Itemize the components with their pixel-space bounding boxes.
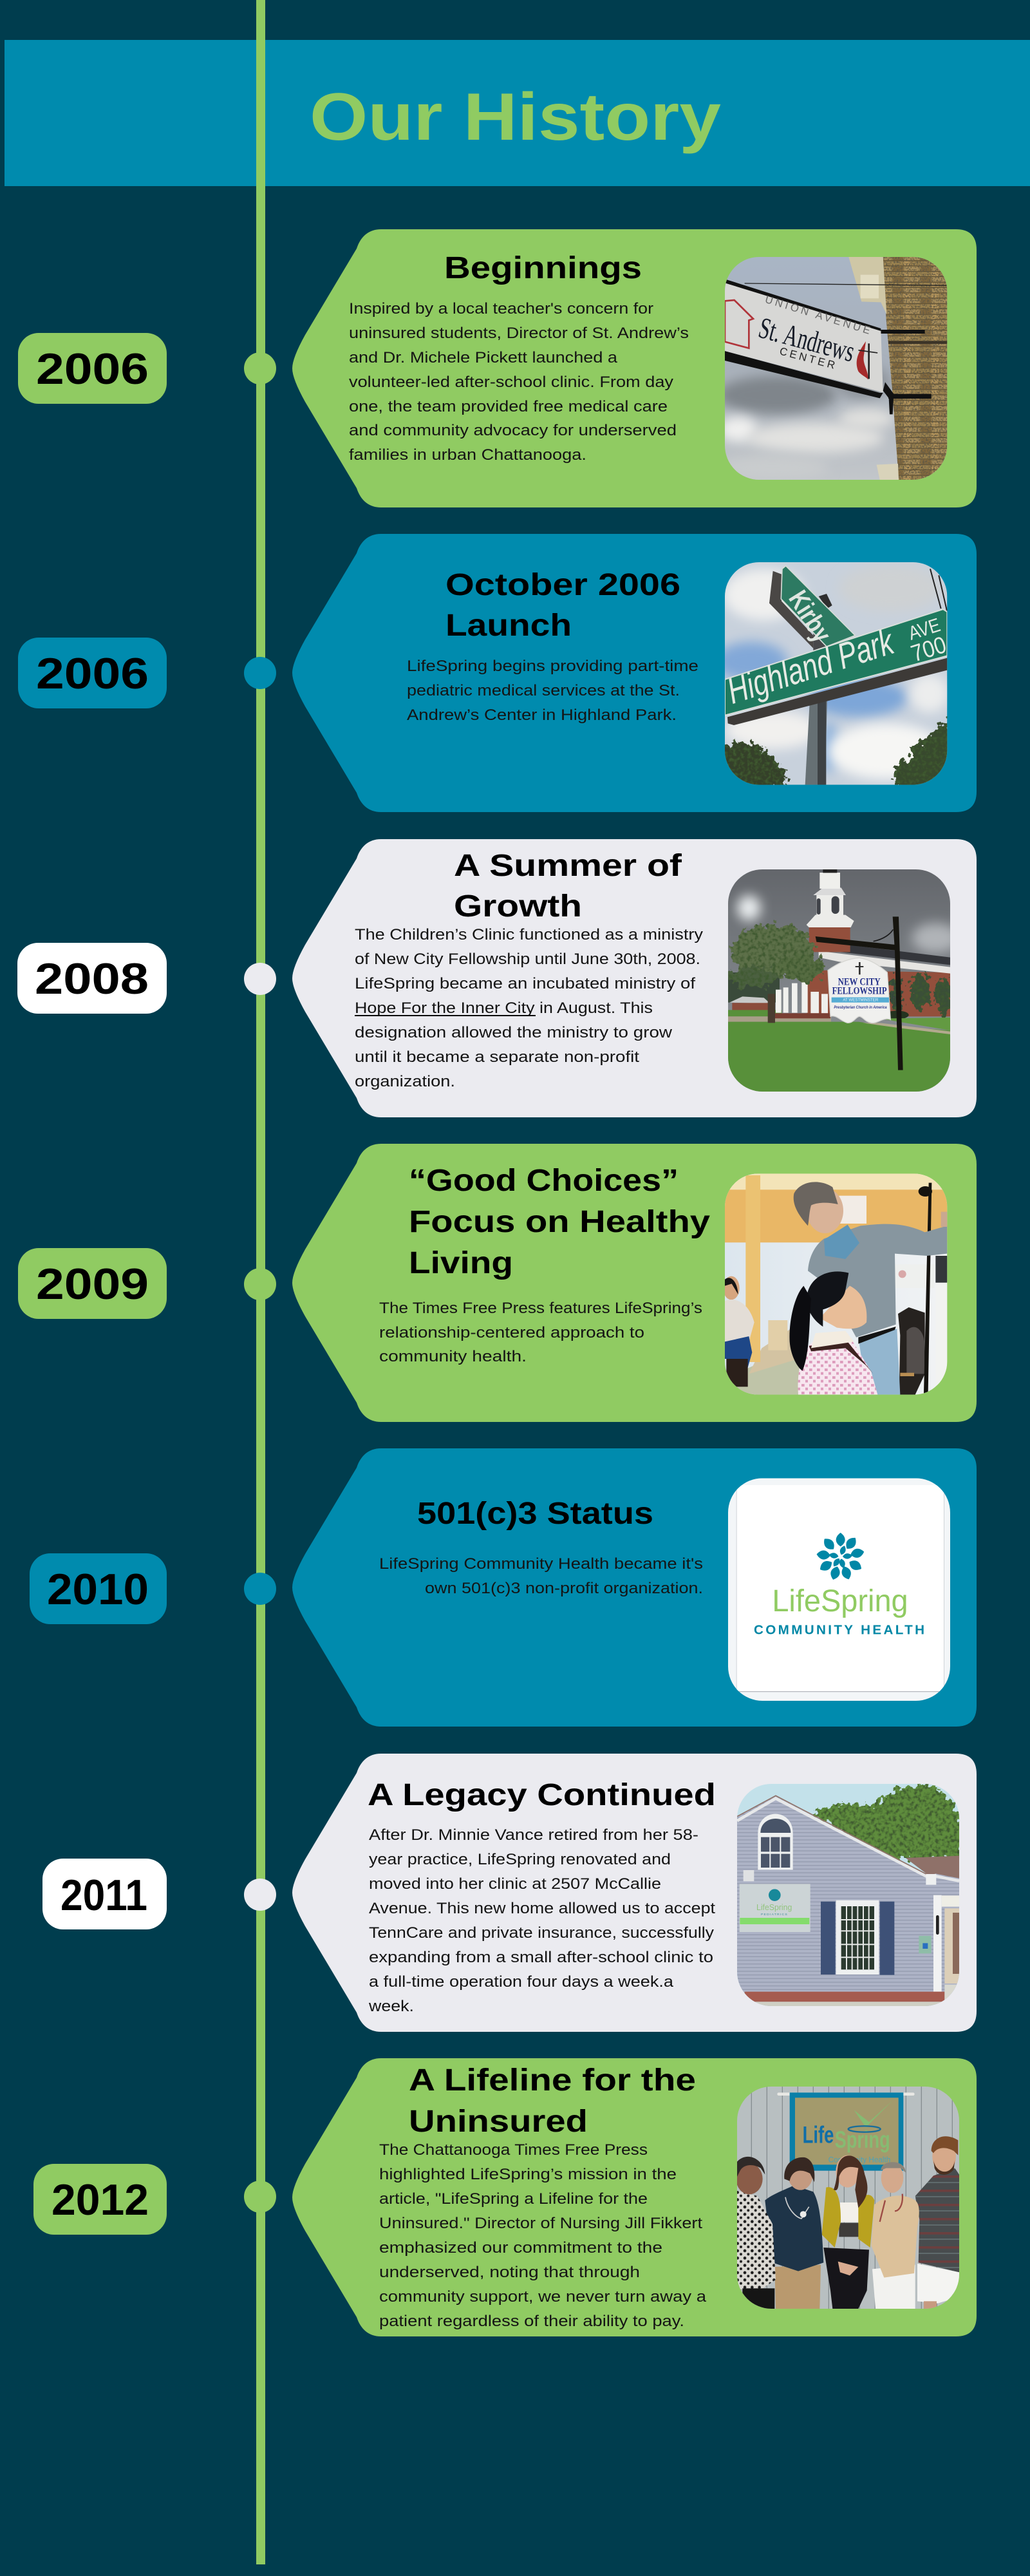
photo: Highland Park street sign: AVE: [906, 614, 943, 645]
body text: and Dr. Michele Pickett launched a: [349, 349, 618, 366]
girl: [789, 1271, 877, 1395]
timeline dot: [244, 657, 276, 689]
heading: “Good Choices”: [409, 1164, 679, 1198]
body text: Hope For the Inner City in August. This: [355, 999, 653, 1017]
wall banner: Community Health: [829, 2155, 890, 2164]
person 1: [736, 2157, 776, 2309]
body text: Uninsured." Director of Nursing Jill Fikkert: [379, 2215, 702, 2232]
photo: New City Fellowship church: AT WESTMINSTER: [843, 999, 879, 1003]
chair and stand: [898, 1183, 932, 1395]
photo: New City Fellowship church: NEW CITY: [838, 976, 881, 987]
year label 2010: [30, 1553, 167, 1624]
standing woman: [794, 1182, 947, 1395]
timeline dot: [244, 963, 276, 995]
card background: [292, 2058, 977, 2336]
body text: week.: [368, 1998, 414, 2015]
logo: LifeSpring Community Health: [728, 1478, 950, 1701]
card background: [292, 534, 977, 812]
clinic sign: PEDIATRICS: [761, 1913, 787, 1917]
body text: own 501(c)3 non-profit organization.: [425, 1580, 703, 1597]
clinic sign: LifeSpring: [756, 1903, 792, 1912]
body text: emphasized our commitment to the: [379, 2239, 662, 2257]
body text: [355, 926, 703, 1090]
photo: Highland Park street sign: [715, 562, 951, 788]
body text: The Chattanooga Times Free Press: [379, 2141, 648, 2159]
seated woman: [723, 1276, 754, 1387]
year label 2012: [33, 2164, 167, 2235]
body text: [379, 1555, 703, 1597]
year label 2011: [42, 1859, 167, 1929]
timeline entry: 2006 October Launch: [18, 534, 977, 812]
logo: LifeSpring Community Health: COMMUNITY HEALTH: [754, 1622, 924, 1637]
photo: St. Andrews Center sign: CENTER: [778, 345, 836, 372]
body text: year practice, LifeSpring renovated and: [369, 1851, 671, 1868]
body text: moved into her clinic at 2507 McCallie: [369, 1875, 661, 1893]
heading: [454, 849, 682, 923]
card background: [292, 1754, 977, 2032]
body text: Avenue. This new home allowed us to accept: [369, 1900, 715, 1917]
year label 2012: 2012: [52, 2175, 149, 2224]
body text: pediatric medical services at the St.: [407, 682, 680, 699]
card background: [292, 1448, 977, 1727]
body text: relationship-centered approach to: [379, 1324, 644, 1341]
body text: and community advocacy for underserved: [349, 422, 677, 439]
body text: [407, 658, 698, 724]
year label 2006: 2006: [36, 345, 149, 393]
person 3: [822, 2155, 874, 2309]
card background: [292, 839, 977, 1117]
photo: clinician measuring a child: [723, 1173, 947, 1395]
heading: Growth: [454, 889, 582, 923]
body text: community support, we never turn away a: [379, 2288, 707, 2306]
wall banner: [790, 2092, 903, 2171]
body text: expanding from a small after-school clinic to: [369, 1949, 713, 1966]
body text: LifeSpring became an incubated ministry of: [355, 975, 695, 992]
wall banner: Life: [803, 2121, 834, 2148]
year label 2008: [17, 943, 167, 1014]
body text: Inspired by a local teacher's concern for: [349, 300, 653, 317]
heading: 501(c)3 Status: [417, 1497, 653, 1531]
person 5: [915, 2136, 959, 2309]
year label 2006: 2006: [36, 649, 149, 698]
year label 2011: 2011: [61, 1871, 147, 1920]
heading: Beginnings: [444, 251, 642, 285]
timeline entry: 2011 A Legacy Continued: [42, 1754, 977, 2032]
body text: [349, 300, 689, 464]
body text: patient regardless of their ability to pay.: [379, 2313, 684, 2330]
body text: The Children’s Clinic functioned as a ministry: [355, 926, 703, 943]
body text: After Dr. Minnie Vance retired from her 58-: [369, 1826, 698, 1844]
heading: [409, 2063, 696, 2139]
body text: article, "LifeSpring a Lifeline for the: [379, 2190, 648, 2208]
person 4: [871, 2162, 919, 2309]
year label 2009: 2009: [36, 1260, 149, 1309]
body text: highlighted LifeSpring’s mission in the: [379, 2166, 677, 2183]
heading: October 2006: [445, 568, 680, 602]
body text: [379, 1300, 702, 1365]
body text: LifeSpring Community Health became it's: [379, 1555, 703, 1573]
clinic sign: [740, 1884, 810, 1932]
body text: families in urban Chattanooga.: [349, 446, 586, 464]
card background: [292, 1144, 977, 1422]
heading: A Summer of: [454, 849, 682, 883]
body text: community health.: [379, 1348, 527, 1365]
body text: The Times Free Press features LifeSpring’s: [379, 1300, 702, 1317]
body text: until it became a separate non-profit: [355, 1048, 639, 1066]
body text: [368, 1826, 715, 2015]
year label 2006: [18, 638, 167, 708]
body text: underserved, noting that through: [379, 2264, 640, 2281]
year label 2008: 2008: [35, 954, 149, 1003]
timeline dot: [244, 1268, 276, 1300]
timeline entry: 2010 501(c)3 Status: [30, 1448, 977, 1727]
photo: Highland Park street sign: 700: [908, 631, 950, 667]
body text: TennCare and private insurance, successfully: [369, 1924, 714, 1942]
photo: New City Fellowship church: [728, 869, 959, 1092]
heading: A Legacy Continued: [368, 1778, 716, 1812]
photo: St. Andrews Center sign: UNION AVENUE: [763, 293, 872, 337]
body text: of New City Fellowship until June 30th, 2008.: [355, 951, 700, 968]
timeline entry: 2009 Good Choices: [18, 1144, 977, 1422]
body text: Andrew’s Center in Highland Park.: [407, 706, 677, 724]
timeline vertical line: [256, 0, 265, 2564]
year label 2010: 2010: [47, 1565, 149, 1614]
heading: Living: [409, 1246, 513, 1280]
photo: St. Andrews Center sign: [716, 257, 947, 481]
wall banner: Spring: [835, 2126, 890, 2153]
logo: LifeSpring Community Health: LifeSpring: [772, 1584, 908, 1618]
title: Our History: [310, 80, 721, 155]
timeline entry: 2006 Beginnings: [18, 229, 977, 507]
body text: designation allowed the ministry to grow: [355, 1024, 673, 1041]
year label 2006: [18, 333, 167, 404]
card background: [292, 229, 977, 507]
timeline dot: [244, 352, 276, 384]
body text: LifeSpring begins providing part-time: [407, 658, 698, 675]
body text: volunteer-led after-school clinic. From day: [349, 374, 673, 391]
photo: Highland Park street sign: Kirby: [783, 585, 838, 647]
heading: [409, 1164, 710, 1280]
heading: Uninsured: [409, 2105, 588, 2139]
timeline dot: [244, 2181, 276, 2213]
heading: Focus on Healthy: [409, 1205, 710, 1239]
photo: New City Fellowship church: Presbyterian Church in America: [834, 1006, 887, 1010]
heading: A Lifeline for the: [409, 2063, 696, 2098]
timeline dot: [244, 1573, 276, 1605]
title banner: [5, 40, 1030, 186]
body text: organization.: [355, 1073, 455, 1090]
heading: [445, 568, 680, 643]
photo: Highland Park street sign: Highland Park: [722, 621, 899, 712]
body text: [379, 2141, 707, 2330]
heading: Launch: [445, 609, 572, 643]
person 2: [765, 2157, 823, 2309]
photo: St. Andrews Center sign: St. Andrews: [755, 311, 858, 369]
photo: New City Fellowship church: FELLOWSHIP: [832, 985, 887, 996]
body text: a full-time operation four days a week.a: [369, 1973, 674, 1991]
timeline entry: 2008 A Summer of Growth: [17, 839, 977, 1117]
body text: one, the team provided free medical care: [349, 398, 668, 415]
timeline dot: [244, 1879, 276, 1911]
photo: LifeSpring staff group: [736, 2087, 959, 2309]
timeline entry: 2012 A Lifeline for the Uninsured: [33, 2058, 977, 2336]
photo: clinic building on McCallie Avenue: [737, 1784, 961, 2006]
year label 2009: [18, 1248, 167, 1319]
flower icon: [816, 1533, 865, 1581]
body text: uninsured students, Director of St. Andrew’s: [349, 325, 689, 342]
